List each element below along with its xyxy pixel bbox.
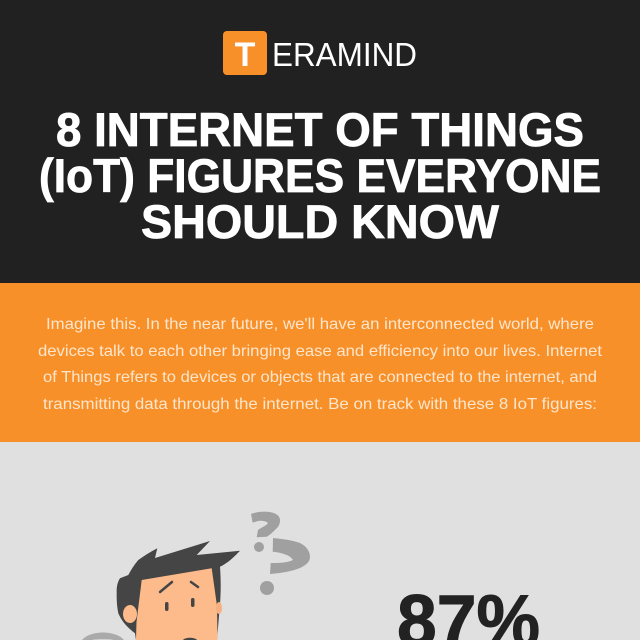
man's face [136, 568, 218, 640]
title: (IoT) FIGURES EVERYONE [39, 149, 601, 202]
title: 8 INTERNET OF THINGS [56, 103, 584, 156]
illustration: confused man [82, 541, 240, 640]
man's eyes [165, 598, 194, 611]
panel: first statistic [0, 442, 640, 640]
introduction text: transmitting data through the internet. Be on track with these 8 IoT figures: [43, 396, 597, 413]
panel: dark header [0, 0, 640, 283]
man's hair [117, 541, 240, 640]
logo: Teramind [223, 31, 417, 75]
introduction text [38, 316, 603, 413]
man's right ear [216, 602, 222, 614]
panel: orange introduction [0, 283, 640, 442]
title: SHOULD KNOW [141, 195, 500, 248]
icon: orange T tile: T [235, 36, 256, 74]
title [39, 103, 601, 248]
man's mouth [183, 638, 197, 640]
man's eyebrows [160, 582, 198, 592]
icon: question marks [251, 512, 310, 595]
icon: magnifier ring [82, 632, 124, 640]
introduction text: devices talk to each other bringing ease and efficiency into our lives. Internet [38, 343, 603, 360]
man's left ear [123, 605, 137, 623]
introduction text: Imagine this. In the near future, we'll have an interconnected world, where [46, 316, 594, 333]
introduction text: of Things refers to devices or objects that are connected to the internet, and [43, 369, 597, 386]
icon: orange T tile [223, 31, 267, 75]
logo wordmark: ERAMIND [272, 37, 417, 74]
